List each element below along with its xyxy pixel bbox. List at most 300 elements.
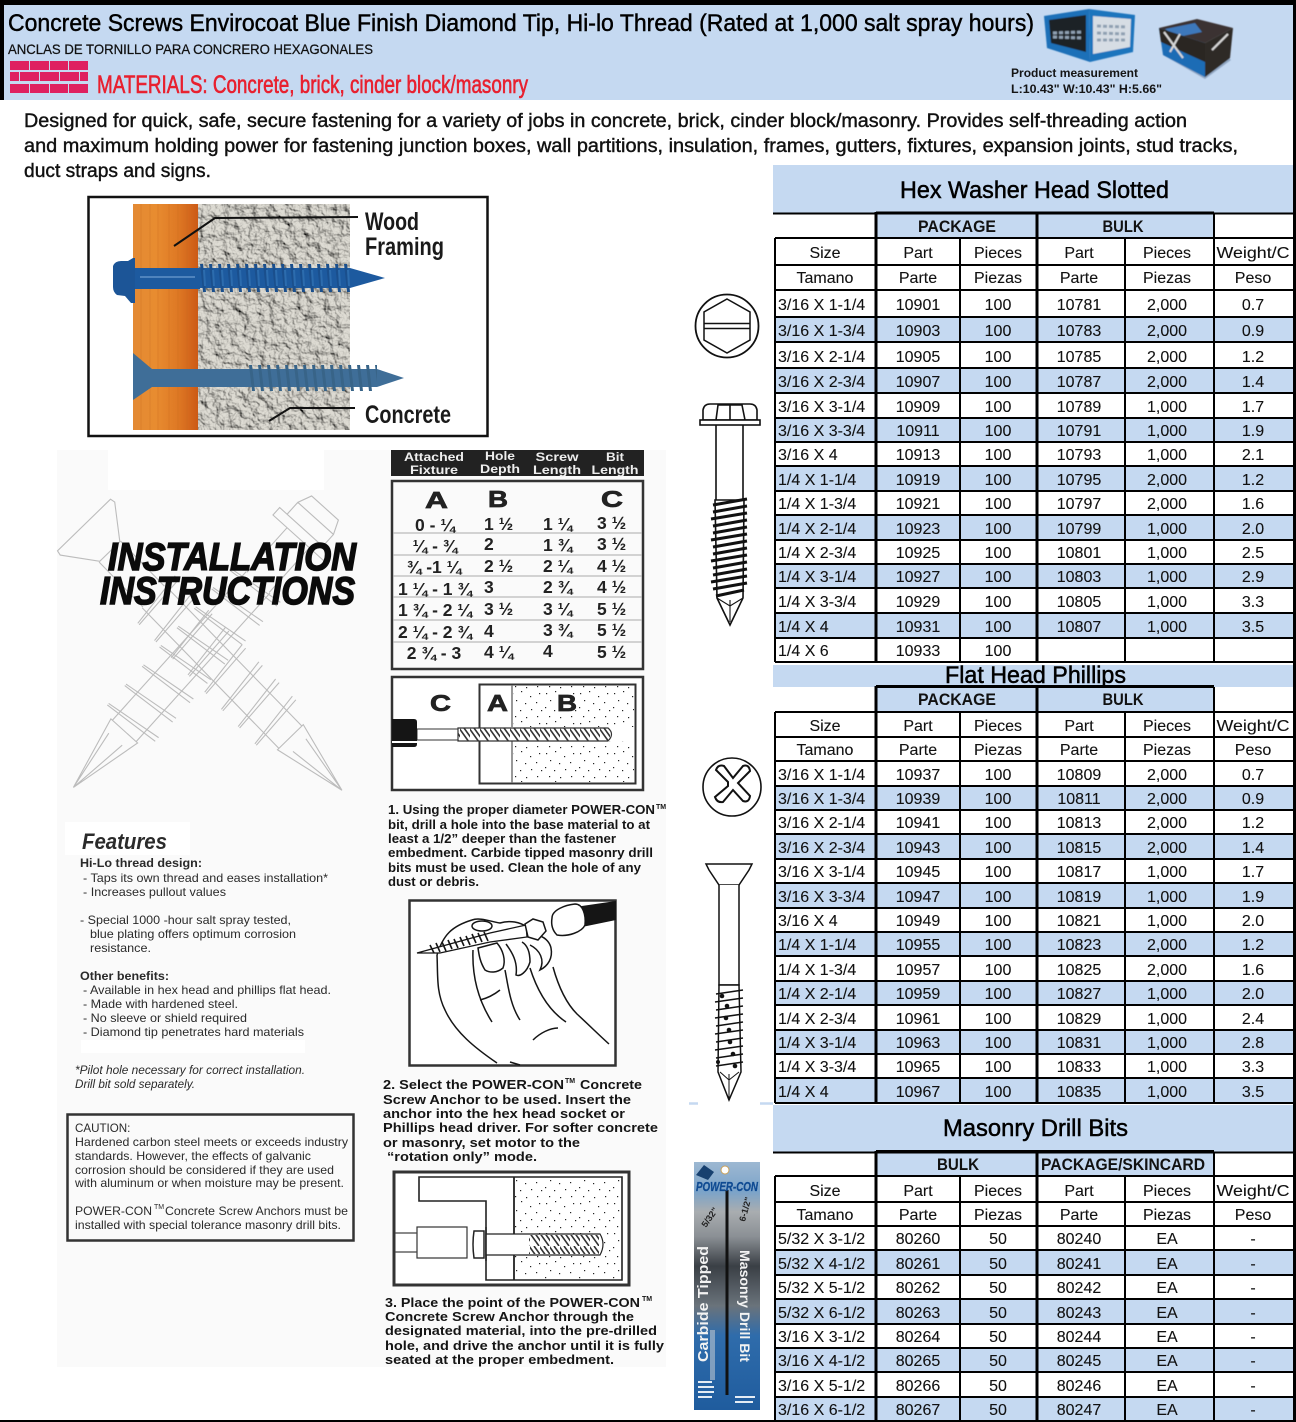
section heading <box>773 165 1293 213</box>
column: package part <box>896 245 940 660</box>
column: bulk pieces: 2,000 <box>1147 937 1187 954</box>
dimension header bar: Hole <box>485 451 515 463</box>
screw in hand <box>417 919 546 953</box>
column: package part: 80244 <box>1057 1329 1101 1346</box>
column: screw length: 2 ¾ <box>543 577 574 597</box>
column: weight <box>1216 245 1290 636</box>
column: package part: Part <box>1064 1183 1094 1200</box>
column: size: 1/4 X 1-3/4 <box>778 962 856 979</box>
column: weight <box>1216 1183 1290 1419</box>
column: bulk part: 80262 <box>896 1280 940 1297</box>
column: package part: 80242 <box>1057 1280 1101 1297</box>
image: drill bit package card: 6-1/2" <box>737 1196 753 1223</box>
column: bit length: 3 ½ <box>597 513 626 533</box>
column: bulk pieces: Piezas <box>1143 270 1191 287</box>
thread design features <box>80 856 328 955</box>
installed screw diagram <box>394 1172 629 1285</box>
column: package pieces: 100 <box>985 545 1011 562</box>
column: package pieces: 100 <box>985 349 1011 366</box>
column: bulk part: 10803 <box>1057 569 1101 586</box>
column: screw length: 1 ¾ <box>543 535 574 555</box>
column: package part: 10921 <box>896 496 940 513</box>
step 1 text: 1. Using the proper diameter POWER-CON <box>388 803 655 817</box>
callout: caution box: standards. However, the effects of galvanic <box>75 1150 311 1163</box>
step 1 text: TM <box>656 804 666 811</box>
column: bulk pieces: 2,000 <box>1147 472 1187 489</box>
column: size: Tamano <box>797 742 854 759</box>
column: size: 1/4 X 3-3/4 <box>778 1059 856 1076</box>
column: bulk part: 10789 <box>1057 399 1101 416</box>
column: size: 3/16 X 3-1/4 <box>778 864 865 881</box>
section heading: Flat Head Phillips <box>945 662 1126 689</box>
description text: and maximum holding power for fastening junction boxes, wall partitions, insulation, frames, gutters, fixtures, expansion joints, stud tracks, <box>24 136 1238 157</box>
column: weight: 1.2 <box>1242 815 1264 832</box>
column: bulk part: 10805 <box>1057 594 1101 611</box>
column: package part: 80245 <box>1057 1353 1101 1370</box>
product measurement <box>1011 66 1162 96</box>
column: attached fixture: ¼ - ¾ <box>413 536 459 556</box>
column: package part: 10931 <box>896 619 940 636</box>
column: bulk pieces: 50 <box>989 1231 1007 1248</box>
column: bit length: 3 ½ <box>597 534 626 554</box>
step 3 text: hole, and drive the anchor until it is fully <box>385 1339 664 1353</box>
column: weight: 1.2 <box>1242 937 1264 954</box>
hex washer head screw side view <box>700 404 760 625</box>
column: package part: 10925 <box>896 545 940 562</box>
column: bulk part <box>1057 718 1101 1101</box>
hex head screw <box>113 258 385 303</box>
column: package part: 10945 <box>896 864 940 881</box>
column: bulk pieces <box>1143 718 1191 1101</box>
column: bulk pieces: 1,000 <box>1147 1011 1187 1028</box>
package and bulk headers: BULK <box>1102 691 1144 709</box>
column: package part: 10909 <box>896 399 940 416</box>
column: package part: 10911 <box>896 423 940 440</box>
thread design features: resistance. <box>90 941 151 955</box>
column: package pieces: 100 <box>985 399 1011 416</box>
column: bulk part: Part <box>1064 718 1094 735</box>
concrete label <box>269 401 451 429</box>
column: bulk part: 10795 <box>1057 472 1101 489</box>
zebra rows <box>775 786 1293 1103</box>
column: size: 1/4 X 4 <box>778 619 829 636</box>
package and bulk headers: BULK <box>1102 218 1144 236</box>
column: weight: Weight/C <box>1216 718 1290 735</box>
column: package pieces: 100 <box>985 297 1011 314</box>
pilot hole note: *Pilot hole necessary for correct installation. <box>75 1063 305 1077</box>
column: bulk pieces: 2,000 <box>1147 815 1187 832</box>
column: package pieces: 100 <box>985 864 1011 881</box>
column: bulk part: Parte <box>899 1207 937 1224</box>
column: bulk part: 80260 <box>896 1231 940 1248</box>
column: bulk pieces: 1,000 <box>1147 399 1187 416</box>
column: bulk pieces: 1,000 <box>1147 594 1187 611</box>
column: package part <box>1057 1183 1101 1419</box>
column: bulk pieces: 1,000 <box>1147 1059 1187 1076</box>
column: package pieces: EA <box>1156 1256 1178 1273</box>
section heading: Hex Washer Head Slotted <box>900 177 1169 204</box>
column: bulk pieces: 50 <box>989 1305 1007 1322</box>
image: drill bit package card: Carbide Tipped <box>695 1246 712 1362</box>
bulk and skincard headers: BULK <box>937 1156 979 1174</box>
dimension header bar: Length <box>592 465 638 477</box>
column: size: 3/16 X 2-3/4 <box>778 840 865 857</box>
drill hole diagram: C <box>430 690 451 716</box>
dimension header bar: Fixture <box>410 465 458 477</box>
column: size: 1/4 X 1-1/4 <box>778 937 856 954</box>
column: weight <box>1216 718 1290 1101</box>
column: package pieces: 100 <box>985 767 1011 784</box>
step 2 text: TM <box>565 1078 575 1085</box>
column: package pieces: 100 <box>985 374 1011 391</box>
column: package part: 80240 <box>1057 1231 1101 1248</box>
column: weight: 2.9 <box>1242 569 1264 586</box>
illustration: hand holding screw <box>410 900 616 1066</box>
dimension header bar <box>391 450 644 477</box>
column: weight: 1.9 <box>1242 889 1264 906</box>
heading: installation instructions <box>100 536 357 613</box>
spanish subtitle: ANCLAS DE TORNILLO PARA CONCRERO HEXAGONALES <box>8 41 373 57</box>
column: bulk part: 10829 <box>1057 1011 1101 1028</box>
column: package pieces: 100 <box>985 1011 1011 1028</box>
callout: caution box: corrosion should be considered if they are used <box>75 1164 334 1177</box>
column: weight: 3.5 <box>1242 1084 1264 1101</box>
other benefits: - Diamond tip penetrates hard materials <box>83 1025 304 1039</box>
column: package pieces: 100 <box>985 1084 1011 1101</box>
column: bulk part: 10835 <box>1057 1084 1101 1101</box>
column: size: 5/32 X 3-1/2 <box>778 1231 865 1248</box>
column: size: Size <box>809 245 841 262</box>
column: bit length: 5 ½ <box>597 642 626 662</box>
column: weight: 2.8 <box>1242 1035 1264 1052</box>
column: bulk part: 10781 <box>1057 297 1101 314</box>
column: bulk part: 10787 <box>1057 374 1101 391</box>
column: bit length: 4 ½ <box>597 556 626 576</box>
column: weight: 3.3 <box>1242 1059 1264 1076</box>
column: size: Tamano <box>797 270 854 287</box>
column: weight: Peso <box>1235 1207 1271 1224</box>
column: size: 1/4 X 2-3/4 <box>778 545 856 562</box>
column: package pieces: 100 <box>985 619 1011 636</box>
column: weight: 2.5 <box>1242 545 1264 562</box>
column: weight: 1.6 <box>1242 496 1264 513</box>
flat head phillips screw side view <box>706 864 752 1100</box>
features heading: Features <box>82 829 167 854</box>
drill hole diagram: A <box>487 690 508 716</box>
column: size: 5/32 X 6-1/2 <box>778 1305 865 1322</box>
column: bulk pieces: 2,000 <box>1147 374 1187 391</box>
column: package part: 80246 <box>1057 1378 1101 1395</box>
column: package pieces: 100 <box>985 423 1011 440</box>
column: size: 1/4 X 2-3/4 <box>778 1011 856 1028</box>
column: size: 1/4 X 2-1/4 <box>778 986 856 1003</box>
column: hole depth <box>484 514 515 662</box>
column: package part: 10933 <box>896 643 940 660</box>
heading: installation instructions: INSTRUCTIONS <box>100 570 355 613</box>
column: weight: 2.1 <box>1242 447 1264 464</box>
column: size <box>778 718 865 1101</box>
column: bulk part: 10825 <box>1057 962 1101 979</box>
column: size: 3/16 X 4-1/2 <box>778 1353 865 1370</box>
column: package pieces: EA <box>1156 1378 1178 1395</box>
callout: caution box: POWER-CON <box>75 1205 152 1218</box>
column: weight: 1.4 <box>1242 840 1264 857</box>
flat head screw <box>133 353 404 400</box>
column: size: 3/16 X 3-1/4 <box>778 399 865 416</box>
column: size <box>778 1183 865 1419</box>
column: package pieces: Pieces <box>974 245 1022 262</box>
column: screw length <box>543 514 574 661</box>
column: hole depth: 4 <box>484 621 494 641</box>
column: bit length: 4 ½ <box>597 577 626 597</box>
column: package part: 10913 <box>896 447 940 464</box>
column: bulk part: 10823 <box>1057 937 1101 954</box>
thread design features: Hi-Lo thread design: <box>80 856 202 870</box>
column: weight: - <box>1250 1280 1256 1297</box>
column: weight: 1.2 <box>1242 349 1264 366</box>
column: bulk pieces: 1,000 <box>1147 619 1187 636</box>
column: attached fixture: 1 ¼ - 1 ¾ <box>398 579 473 599</box>
step 3 text <box>385 1296 664 1367</box>
column: bulk part: 80261 <box>896 1256 940 1273</box>
dimension header bar: Length <box>533 465 581 477</box>
column: package part: 10901 <box>896 297 940 314</box>
column: screw length: 3 ¼ <box>543 599 574 619</box>
zebra rows <box>775 317 1293 638</box>
column: weight: 1.9 <box>1242 423 1264 440</box>
column: package pieces: 100 <box>985 643 1011 660</box>
column: package part: 10949 <box>896 913 940 930</box>
column: size: 3/16 X 1-1/4 <box>778 297 865 314</box>
column: size: 1/4 X 1-1/4 <box>778 472 856 489</box>
column: package pieces: EA <box>1156 1329 1178 1346</box>
thread design features: blue plating offers optimum corrosion <box>90 927 296 941</box>
column: package part: 10941 <box>896 815 940 832</box>
column: bulk part <box>1057 245 1101 636</box>
column: size: 3/16 X 3-3/4 <box>778 889 865 906</box>
column: hole depth: 3 <box>484 577 494 597</box>
column: size: 3/16 X 2-3/4 <box>778 374 865 391</box>
column: attached fixture: 2 ¾ - 3 <box>407 643 461 663</box>
step 2 text: Phillips head driver. For softer concrete <box>383 1121 658 1135</box>
drill hole diagram: B <box>557 690 577 716</box>
column: bulk pieces: 1,000 <box>1147 913 1187 930</box>
callout: caution box: TM <box>154 1204 164 1211</box>
column: package pieces <box>974 245 1022 660</box>
column: package pieces: 100 <box>985 447 1011 464</box>
step 3 text: seated at the proper embedment. <box>385 1353 614 1367</box>
column: package part: 10957 <box>896 962 940 979</box>
column: bulk part: Parte <box>1060 270 1098 287</box>
column: bulk pieces: 50 <box>989 1378 1007 1395</box>
column: weight: 2.0 <box>1242 521 1264 538</box>
dimension header bar: Bit <box>606 452 624 464</box>
column: bulk part: 80264 <box>896 1329 940 1346</box>
column: screw length: 3 ¾ <box>543 620 574 640</box>
column: bulk part <box>896 1183 940 1419</box>
thread design features: - Increases pullout values <box>83 885 226 899</box>
column: size: 3/16 X 3-3/4 <box>778 423 865 440</box>
column: package part: 10943 <box>896 840 940 857</box>
panel: masonry drill bits table <box>773 1105 1293 1420</box>
column: bulk pieces: 1,000 <box>1147 986 1187 1003</box>
column: bulk pieces: 50 <box>989 1329 1007 1346</box>
column: package pieces: 100 <box>985 1059 1011 1076</box>
column: package pieces <box>1143 1183 1191 1419</box>
column letters: A <box>425 487 448 513</box>
decorative ticks <box>689 1102 773 1105</box>
column: package part: 10947 <box>896 889 940 906</box>
column: package part: Parte <box>1060 1207 1098 1224</box>
step 1 text: dust or debris. <box>388 875 479 889</box>
zebra rows <box>775 1250 1293 1420</box>
column: screw length: 2 ¼ <box>543 556 574 576</box>
column: package pieces: EA <box>1156 1280 1178 1297</box>
column: size: 3/16 X 6-1/2 <box>778 1402 865 1419</box>
column: weight: 0.9 <box>1242 791 1264 808</box>
column: size: 5/32 X 5-1/2 <box>778 1280 865 1297</box>
step 2 text: “rotation only” mode. <box>387 1150 537 1164</box>
description text: duct straps and signs. <box>24 161 211 182</box>
column: size: 1/4 X 6 <box>778 643 829 660</box>
step 3 text: designated material, into the pre-drilled <box>385 1324 657 1338</box>
column: size: 3/16 X 2-1/4 <box>778 815 865 832</box>
step 3 text: Concrete Screw Anchor through the <box>385 1310 634 1324</box>
bulk and skincard headers: PACKAGE/SKINCARD <box>1041 1156 1205 1174</box>
column: bulk pieces: Pieces <box>1143 245 1191 262</box>
column: package part: 80241 <box>1057 1256 1101 1273</box>
package and bulk headers <box>876 213 1214 238</box>
column: bulk part: Parte <box>1060 742 1098 759</box>
other benefits: - Made with hardened steel. <box>83 997 238 1011</box>
column: weight: 0.9 <box>1242 323 1264 340</box>
panel: flat head phillips table <box>773 662 1293 1103</box>
column: package pieces: 100 <box>985 594 1011 611</box>
column: weight: - <box>1250 1329 1256 1346</box>
column: bulk pieces: Piezas <box>974 1207 1022 1224</box>
column: package pieces: 100 <box>985 1035 1011 1052</box>
column: size: 1/4 X 3-3/4 <box>778 594 856 611</box>
step 2 text: Screw Anchor to be used. Insert the <box>383 1093 631 1107</box>
column: package pieces: 100 <box>985 913 1011 930</box>
package and bulk headers <box>876 687 1214 712</box>
column: bulk part: 10791 <box>1057 423 1101 440</box>
column: weight: 2.0 <box>1242 986 1264 1003</box>
image: drill bit package card <box>694 1162 760 1410</box>
column: size: Size <box>809 1183 841 1200</box>
panel: wood and concrete screw photo <box>88 197 488 436</box>
column: weight: 1.4 <box>1242 374 1264 391</box>
column: attached fixture: 0 - ¼ <box>415 515 456 535</box>
column: weight: Weight/C <box>1216 1183 1290 1200</box>
column: size: 3/16 X 1-3/4 <box>778 791 865 808</box>
thread design features: - Special 1000 -hour salt spray tested, <box>80 913 291 927</box>
column: size: 3/16 X 4 <box>778 447 838 464</box>
column: size: Size <box>809 718 841 735</box>
column: bulk pieces: 1,000 <box>1147 521 1187 538</box>
product measurement: L:10.43" W:10.43" H:5.66" <box>1011 82 1162 96</box>
column: package pieces: Piezas <box>974 270 1022 287</box>
column: bulk pieces: 50 <box>989 1256 1007 1273</box>
image: drill bit package card: POWER-CON <box>696 1179 758 1194</box>
column: weight: 1.2 <box>1242 472 1264 489</box>
description text: Designed for quick, safe, secure fastening for a variety of jobs in concrete, brick, cinder block/masonry. Provides self-threading action <box>24 111 1187 132</box>
concrete block <box>198 204 350 430</box>
column: size: 3/16 X 3-1/2 <box>778 1329 865 1346</box>
socket driver <box>552 901 616 935</box>
column: package pieces: Piezas <box>974 742 1022 759</box>
column: package part: 80243 <box>1057 1305 1101 1322</box>
column: package pieces: 100 <box>985 521 1011 538</box>
bulk and skincard headers <box>876 1152 1214 1176</box>
column: bulk pieces: Pieces <box>1143 718 1191 735</box>
column: bulk part: 10809 <box>1057 767 1101 784</box>
package and bulk headers: PACKAGE <box>918 218 996 236</box>
materials line: MATERIALS: Concrete, brick, cinder block/masonry <box>97 71 528 99</box>
column: package part: 10955 <box>896 937 940 954</box>
column: package part: 10959 <box>896 986 940 1003</box>
column: hole depth: 2 <box>484 534 494 554</box>
column: package pieces: 100 <box>985 889 1011 906</box>
column: bulk part: 80266 <box>896 1378 940 1395</box>
column: package pieces: EA <box>1156 1402 1178 1419</box>
column: weight: - <box>1250 1256 1256 1273</box>
column: package part: Parte <box>899 742 937 759</box>
column: bulk pieces: 2,000 <box>1147 962 1187 979</box>
section heading <box>773 662 1293 689</box>
column: package part: 10929 <box>896 594 940 611</box>
column: size: 3/16 X 2-1/4 <box>778 349 865 366</box>
hand outline <box>437 919 609 1065</box>
column: weight: 0.7 <box>1242 297 1264 314</box>
icon: brick wall <box>10 61 88 93</box>
column: bulk pieces: 50 <box>989 1280 1007 1297</box>
other benefits: - No sleeve or shield required <box>83 1011 247 1025</box>
column: size <box>778 245 865 660</box>
column: hole depth: 4 ¼ <box>484 642 515 662</box>
column: bulk pieces: 2,000 <box>1147 840 1187 857</box>
step 2 text: anchor into the hex head socket or <box>383 1107 625 1121</box>
column: bulk part: 10797 <box>1057 496 1101 513</box>
column: hole depth: 1 ½ <box>484 514 513 534</box>
column: attached fixture: 2 ¼ - 2 ¾ <box>398 622 473 642</box>
column: bulk part: 10807 <box>1057 619 1101 636</box>
column: size: 3/16 X 5-1/2 <box>778 1378 865 1395</box>
concrete label: Concrete <box>365 401 451 429</box>
column: weight: 2.4 <box>1242 1011 1264 1028</box>
column: bulk pieces: 1,000 <box>1147 889 1187 906</box>
column: package pieces: 100 <box>985 472 1011 489</box>
image: product carton <box>1159 19 1233 79</box>
column: bulk pieces: 1,000 <box>1147 447 1187 464</box>
image: retail display box <box>1044 9 1135 62</box>
column: weight: 3.5 <box>1242 619 1264 636</box>
column: bulk part: 10827 <box>1057 986 1101 1003</box>
column: package pieces: 100 <box>985 986 1011 1003</box>
column: bulk part: 10799 <box>1057 521 1101 538</box>
column: bit length: 5 ½ <box>597 599 626 619</box>
wood framing block <box>133 204 198 430</box>
step 3 text: 3. Place the point of the POWER-CON <box>385 1296 640 1310</box>
thread design features: - Taps its own thread and eases installation* <box>83 871 328 885</box>
column: package part: 10937 <box>896 767 940 784</box>
column: package pieces: 100 <box>985 937 1011 954</box>
column: weight: 2.0 <box>1242 913 1264 930</box>
column: bit length: 5 ½ <box>597 620 626 640</box>
wood framing label <box>174 208 444 261</box>
column: bulk pieces: 2,000 <box>1147 323 1187 340</box>
heading: installation instructions: INSTALLATION <box>108 536 357 579</box>
